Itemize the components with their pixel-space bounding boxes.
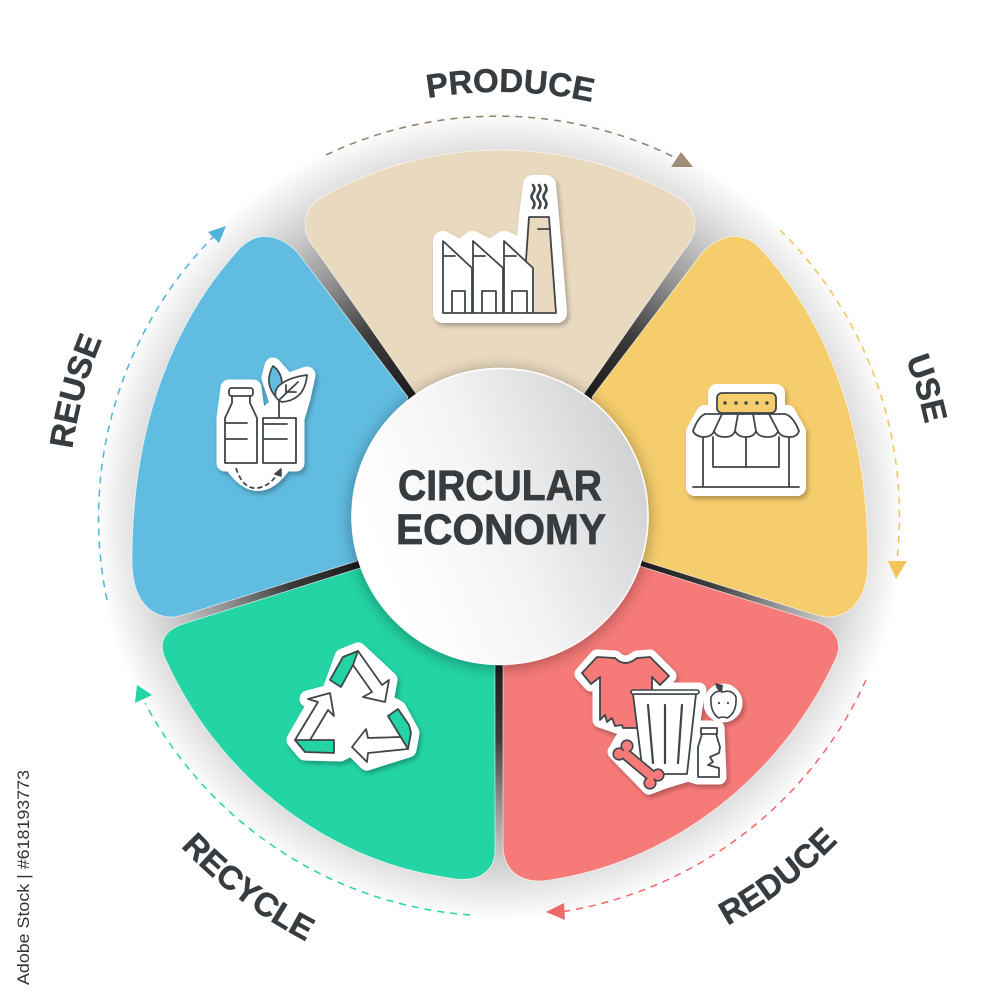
icon: store [693, 393, 799, 487]
arrow: produce [326, 116, 693, 167]
label: produce: PRODUCE [426, 68, 595, 102]
panel: use segment [592, 237, 868, 617]
centre circle: ECONOMY [396, 506, 606, 554]
label: use: USE [908, 353, 948, 424]
label: reuse: REUSE [50, 332, 102, 448]
icon: recycle arrows [295, 651, 411, 762]
panel: produce segment [305, 150, 695, 395]
centre circle [352, 368, 648, 664]
arrow: reuse [99, 226, 226, 600]
icon: waste bin and scraps [582, 657, 736, 790]
circular diagram [95, 111, 905, 921]
label: reduce: REDUCE [718, 826, 838, 925]
icon: reusable bottles and leaves [225, 366, 307, 488]
panel: reduce segment [503, 566, 839, 881]
id text: Adobe Stock | #618193773 [14, 770, 33, 985]
icon: bone [612, 739, 665, 790]
arrow: reduce [546, 680, 866, 920]
centre title: CIRCULAR [398, 462, 602, 510]
panel: reuse segment [132, 237, 408, 617]
icon: factory [443, 185, 557, 313]
arrow: recycle [135, 685, 470, 915]
arrow: use [780, 230, 907, 579]
panel: recycle segment [162, 568, 495, 879]
label: recycle: RECYCLE [182, 832, 316, 942]
